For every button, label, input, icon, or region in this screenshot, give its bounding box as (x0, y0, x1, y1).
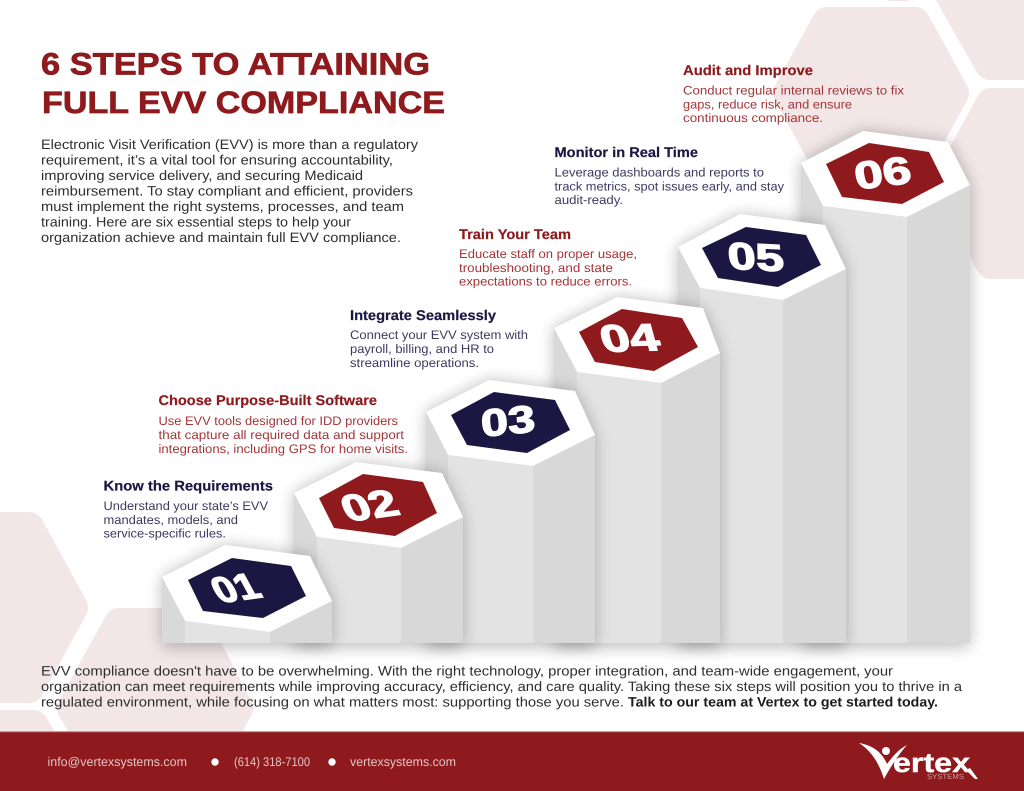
step column 02 (294, 462, 463, 647)
number 03: 03 (479, 398, 537, 446)
step 3 text: Integrate Seamlessly: streamline operations. (350, 356, 479, 370)
title (41, 46, 445, 120)
footer bar (0, 731, 1024, 791)
step 5 text: Monitor in Real Time: audit-ready. (554, 193, 623, 207)
step 2 text: Choose Purpose-Built Software: that capture all required data and support (158, 428, 405, 442)
intro paragraph: training. Here are six essential steps to help your (41, 214, 351, 230)
closing paragraph: EVV compliance doesn't have to be overwhelming. With the right technology, proper integration, and team-wide engagement, your (41, 664, 894, 678)
step 4 text: Train Your Team: troubleshooting, and state (459, 261, 613, 275)
step 6 text: Audit and Improve: Conduct regular internal reviews to fix (683, 84, 905, 98)
step 6 text: Audit and Improve: Audit and Improve (683, 62, 813, 78)
step 3 text: Integrate Seamlessly: payroll, billing, and HR to (350, 342, 494, 356)
step 2 text: Choose Purpose-Built Software (158, 392, 408, 456)
website: vertexsystems.com (350, 755, 456, 769)
intro paragraph: requirement, it’s a vital tool for ensuring accountability, (41, 152, 393, 168)
step 1 text: Know the Requirements (104, 478, 273, 540)
step 3 text: Integrate Seamlessly: Integrate Seamlessly (350, 307, 496, 323)
step 5 text: Monitor in Real Time: Leverage dashboards and reports to (554, 166, 764, 180)
step 1 text: Know the Requirements: service-specific rules. (104, 526, 226, 540)
logo dot (882, 747, 890, 755)
logo: Vertex Systems (859, 743, 978, 781)
step 4 text: Train Your Team: Train Your Team (459, 226, 571, 242)
step 2 text: Choose Purpose-Built Software: Choose Purpose-Built Software (158, 392, 377, 408)
intro paragraph: organization achieve and maintain full EVV compliance. (41, 230, 401, 245)
step 6 text: Audit and Improve: gaps, reduce risk, and ensure (683, 98, 852, 112)
number 04: 04 (595, 317, 664, 361)
step 4 text: Train Your Team (459, 226, 637, 288)
intro paragraph: must implement the right systems, processes, and team (41, 199, 404, 214)
step 5 text: Monitor in Real Time (554, 144, 785, 207)
closing paragraph: Talk to our team at Vertex to get started today. (628, 694, 938, 710)
step 1 text: Know the Requirements: Understand your state’s EVV (104, 499, 269, 513)
step 6 text: Audit and Improve (683, 62, 905, 125)
logo wordmark: ertex (893, 748, 970, 778)
intro paragraph (41, 137, 418, 245)
step column 01 (162, 545, 332, 647)
number 06: 06 (851, 149, 915, 199)
step 6 text: Audit and Improve: continuous compliance. (683, 111, 823, 125)
step column 05 (678, 214, 846, 647)
step column 04 (554, 297, 720, 647)
step 5 text: Monitor in Real Time: Monitor in Real Time (554, 144, 698, 160)
number 01: 01 (204, 567, 268, 611)
step 2 text: Choose Purpose-Built Software: integrations, including GPS for home visits. (158, 442, 408, 456)
email: info@vertexsystems.com (48, 755, 187, 769)
step 4 text: Train Your Team: expectations to reduce errors. (459, 274, 632, 288)
closing paragraph: organization can meet requirements while improving accuracy, efficiency, and care quality. Taking these six steps will position you to thrive in a (41, 679, 962, 694)
step 2 text: Choose Purpose-Built Software: Use EVV tools designed for IDD providers (158, 414, 398, 428)
title: 6 STEPS TO ATTAINING (41, 46, 430, 82)
bullet (328, 758, 336, 766)
number 05: 05 (726, 236, 786, 280)
step 3 text: Integrate Seamlessly (350, 307, 528, 370)
closing paragraph (41, 664, 962, 710)
title: FULL EVV COMPLIANCE (42, 85, 445, 120)
phone: (614) 318-7100 (234, 755, 310, 769)
closing paragraph: regulated environment, while focusing on what matters most: supporting those you serve. (41, 694, 624, 710)
step 5 text: Monitor in Real Time: track metrics, spot issues early, and stay (554, 180, 785, 194)
logo sub-label: SYSTEMS (927, 772, 964, 781)
step 4 text: Train Your Team: Educate staff on proper usage, (459, 247, 637, 261)
intro paragraph: improving service delivery, and securing Medicaid (41, 168, 363, 183)
step column 06 (801, 131, 970, 647)
step 1 text: Know the Requirements: Know the Requirements (104, 478, 273, 494)
intro paragraph: Electronic Visit Verification (EVV) is more than a regulatory (41, 137, 418, 152)
step 3 text: Integrate Seamlessly: Connect your EVV system with (350, 328, 528, 342)
step 1 text: Know the Requirements: mandates, models, and (104, 513, 238, 527)
number 02: 02 (334, 483, 406, 530)
logo swoosh mark (859, 743, 907, 779)
logo x tail (966, 768, 978, 779)
bullet (211, 758, 219, 766)
intro paragraph: reimbursement. To stay compliant and efficient, providers (41, 184, 413, 198)
step column 03 (426, 380, 595, 647)
